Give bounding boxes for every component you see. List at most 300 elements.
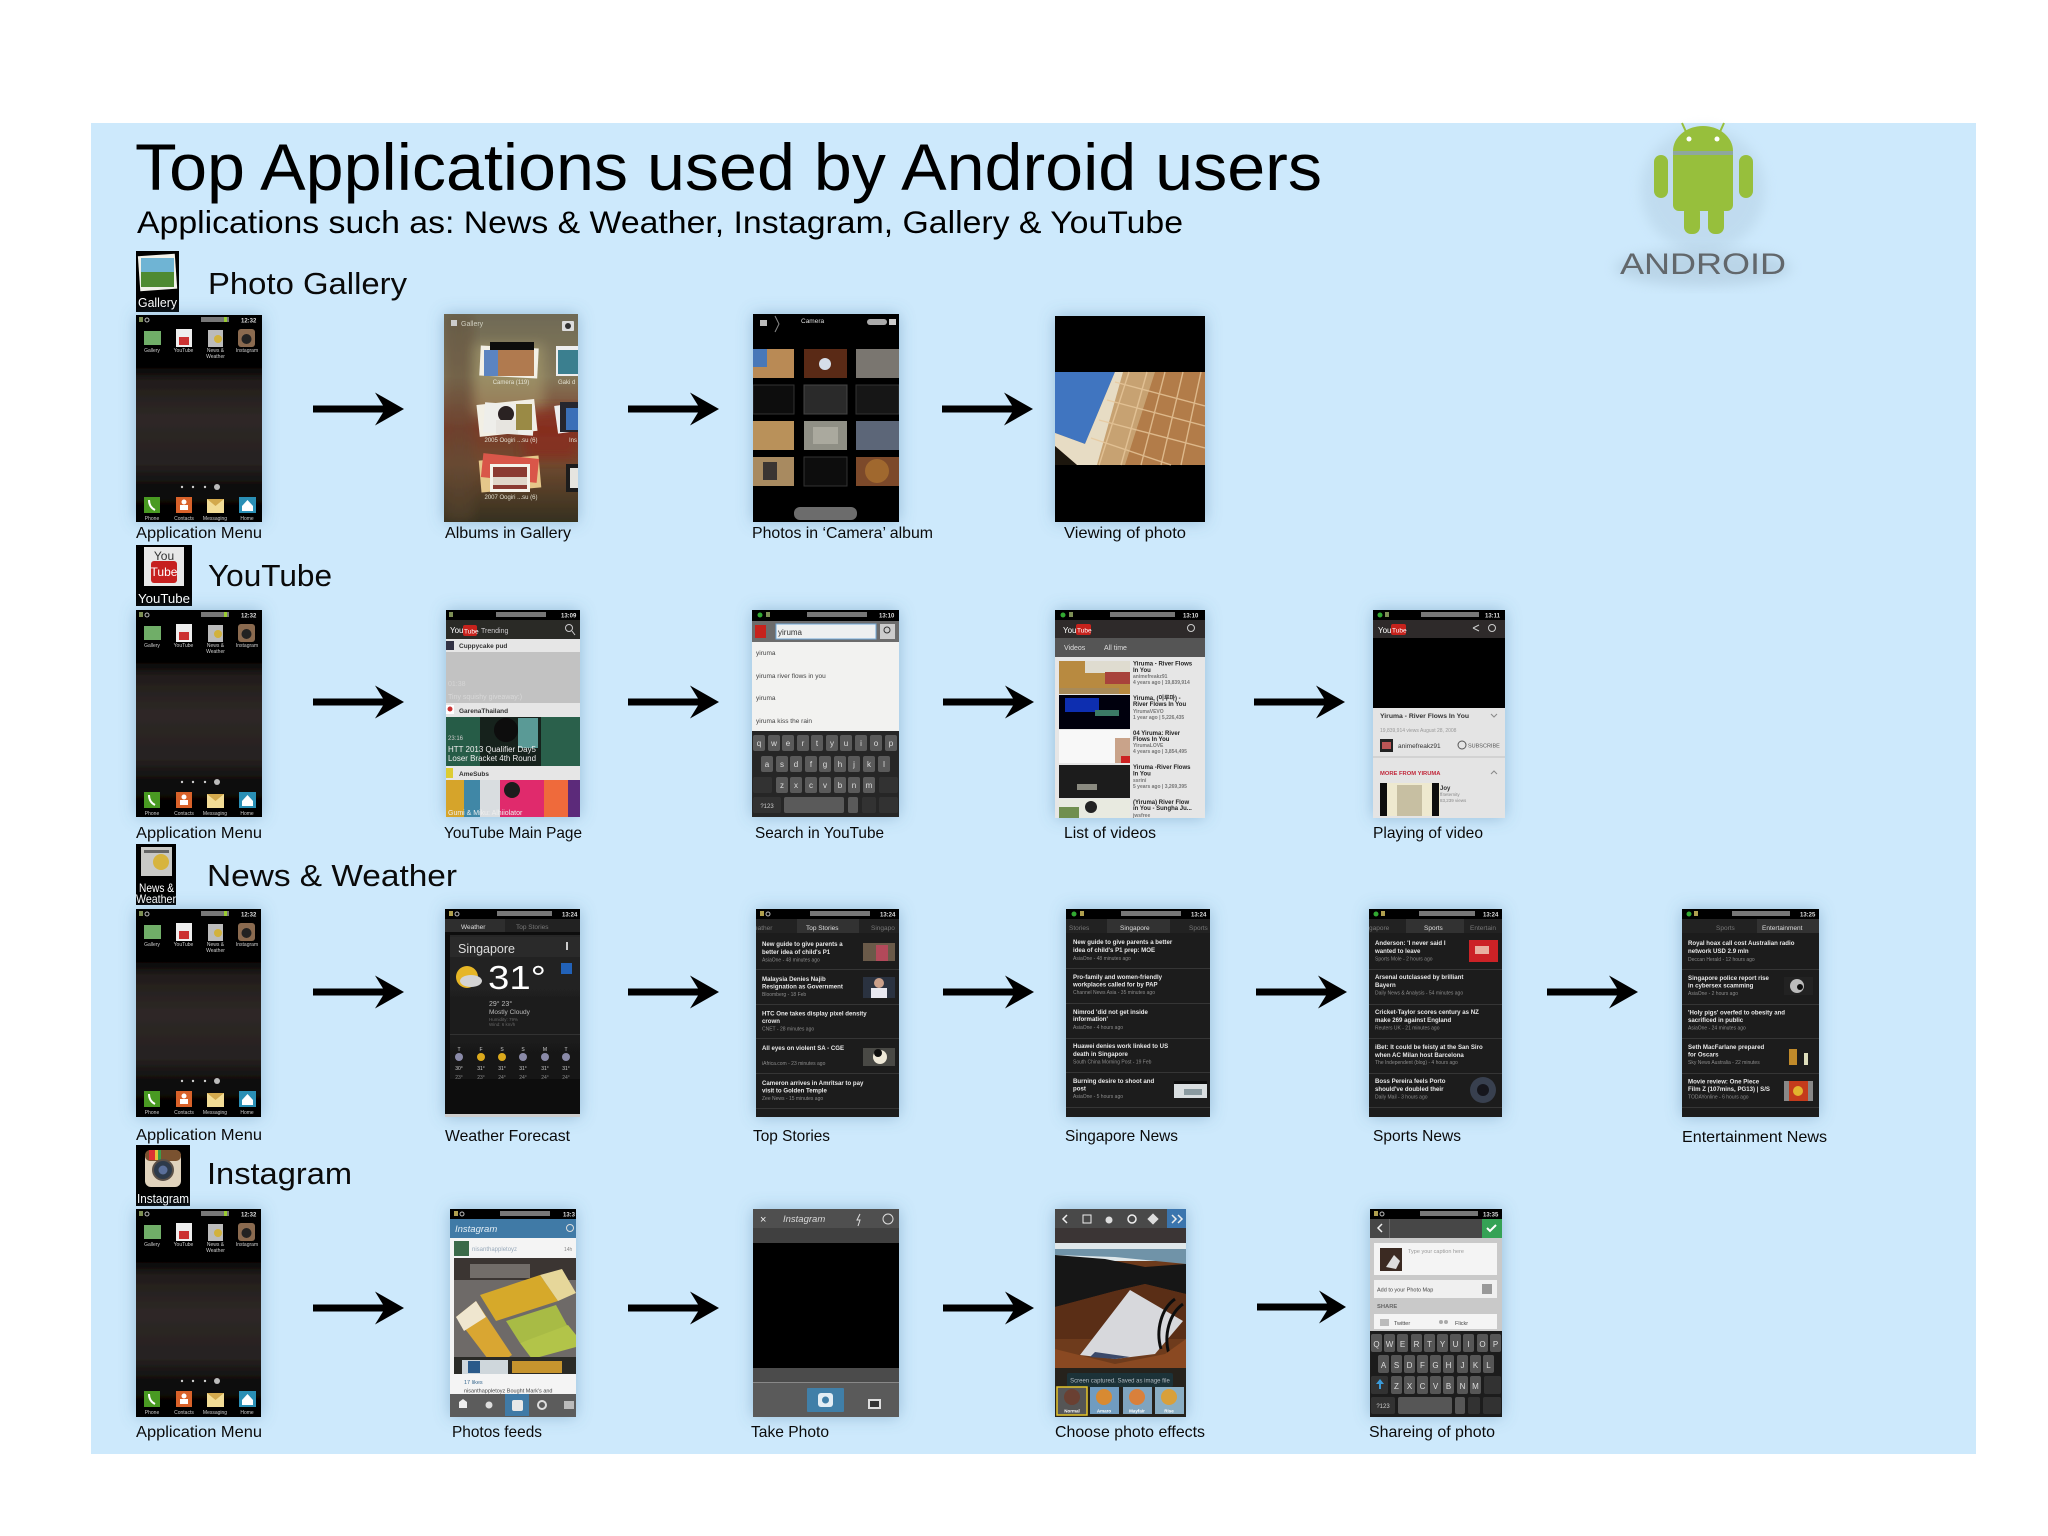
phone: playing of video xyxy=(1373,610,1505,818)
row: Instagram xyxy=(136,1145,1502,1441)
phone: YouTube main page: Tube xyxy=(464,628,479,636)
phone: application menu: YouTube xyxy=(174,348,194,354)
phone: application menu: 12:32 xyxy=(241,1212,257,1218)
phone: top stories: All eyes on violent SA - CGE xyxy=(762,1045,844,1052)
phone: photos feeds xyxy=(450,1209,576,1417)
phone: sports news: wanted to leave xyxy=(1374,948,1421,955)
icon: news and weather: News & xyxy=(139,881,174,895)
phone: Singapore news: AsiaOne - 5 hours ago xyxy=(1073,1094,1123,1100)
phone: YouTube main page: You xyxy=(450,626,464,635)
phone: application menu: News & xyxy=(207,643,225,649)
phone: top stories: Malaysia Denies Najib xyxy=(762,976,826,983)
phone: application menu: Phone xyxy=(145,811,159,817)
phone: sharing of photo: M xyxy=(1472,1382,1479,1391)
phone: photos in camera album: Camera xyxy=(801,318,825,325)
phone: Singapore news: Channel News Asia - 35 minutes ago xyxy=(1073,990,1155,996)
icon: news and weather: Weather xyxy=(136,892,176,906)
phone: top stories: iAfrica.com - 23 minutes ago xyxy=(762,1061,826,1067)
phone: application menu: 12:32 xyxy=(241,614,257,620)
phone: search in YouTube: n xyxy=(852,781,856,790)
phone: application menu: News & xyxy=(207,348,225,354)
phone: Singapore news: Huawei denies work linked to US xyxy=(1073,1043,1168,1050)
phone: sharing of photo: R xyxy=(1414,1340,1420,1349)
caption: application menu: Application Menu xyxy=(136,825,262,842)
caption: application menu: Application Menu xyxy=(136,525,262,542)
caption: playing of video: Playing of video xyxy=(1373,825,1483,842)
phone: top stories: AsiaOne - 48 minutes ago xyxy=(762,958,820,964)
phone: list of videos: YirumaLOVE xyxy=(1133,743,1164,749)
arrow xyxy=(313,976,404,1008)
phone: take photo xyxy=(753,1209,899,1417)
icon: gallery: Gallery xyxy=(138,296,178,310)
phone: weather forecast: 24° xyxy=(562,1075,570,1081)
phone: list of videos: River Flows In You xyxy=(1133,702,1186,708)
phone: application menu: Weather xyxy=(206,948,225,954)
phone: playing of video: animefreakz91 xyxy=(1398,743,1441,750)
phone: application menu: Weather xyxy=(206,1248,225,1254)
phone: albums in gallery: 2005 Oogiri ...su (6) xyxy=(484,438,538,444)
caption: sharing of photo: Shareing of photo xyxy=(1369,1424,1495,1441)
caption: YouTube main page: YouTube Main Page xyxy=(444,825,582,842)
phone: sports news: Daily News & Analysis - 54 minutes ago xyxy=(1375,990,1463,996)
phone: entertainment news: Royal hoax call cost Australian radio xyxy=(1688,940,1795,947)
phone: application menu: Gallery xyxy=(144,348,160,354)
caption: choose photo effects: Choose photo effects xyxy=(1055,1424,1205,1441)
phone: sports news: iBet: It could be feisty at the San Siro xyxy=(1375,1044,1483,1051)
phone: sharing of photo: U xyxy=(1453,1340,1459,1349)
phone: search in YouTube: g xyxy=(823,760,827,769)
icon: YouTube: You xyxy=(154,549,174,563)
icon: gallery xyxy=(136,251,179,312)
phone: weather forecast: 24° xyxy=(519,1075,527,1081)
phone: list of videos: ssrini xyxy=(1133,778,1147,784)
phone: YouTube main page: HTT 2013 Qualifier Day5 xyxy=(448,745,537,754)
phone: photos feeds: 13:3 xyxy=(563,1212,576,1218)
phone: search in YouTube: y xyxy=(830,739,834,748)
phone: top stories: Top Stories xyxy=(806,925,839,932)
phone: weather forecast: S xyxy=(521,1047,525,1053)
phone: application menu: Home xyxy=(240,811,254,817)
caption: photos feeds: Photos feeds xyxy=(452,1424,542,1441)
phone: Singapore news: Singapore xyxy=(1120,925,1150,932)
phone: sports news: when AC Milan host Barcelona xyxy=(1374,1052,1464,1059)
caption: Singapore news: Singapore News xyxy=(1065,1128,1178,1145)
phone: sports news: Cricket-Taylor scores century as NZ xyxy=(1375,1009,1479,1016)
arrow xyxy=(628,1292,719,1324)
phone: search in YouTube: b xyxy=(838,781,843,790)
phone: YouTube main page: 23:16 xyxy=(448,736,464,742)
phone: application menu: YouTube xyxy=(174,1242,194,1248)
phone: weather forecast: F xyxy=(479,1047,483,1053)
phone: list of videos: 1 year ago | 5,226,435 xyxy=(1133,715,1184,721)
phone: weather forecast: 31° xyxy=(498,1066,506,1072)
phone: weather forecast: 23° xyxy=(455,1075,463,1081)
phone: Singapore news: 13:24 xyxy=(1191,912,1207,918)
phone: playing of video: Tube xyxy=(1392,628,1407,634)
phone: sports news: Reuters UK - 21 minutes ago xyxy=(1375,1026,1440,1032)
icon: YouTube: Tube xyxy=(151,565,178,579)
phone: choose photo effects xyxy=(1055,1209,1186,1417)
phone: search in YouTube: d xyxy=(794,760,798,769)
icon: YouTube xyxy=(136,545,192,606)
phone: sharing of photo: Z xyxy=(1394,1382,1399,1391)
phone: search in YouTube: v xyxy=(823,781,827,790)
arrow xyxy=(1547,976,1638,1008)
phone: sharing of photo: P xyxy=(1493,1340,1498,1349)
phone: entertainment news: Seth MacFarlane prepared xyxy=(1688,1044,1764,1051)
phone: take photo: Instagram xyxy=(783,1214,825,1225)
arrow xyxy=(628,976,719,1008)
phone: YouTube main page: 13:09 xyxy=(561,614,577,620)
phone: playing of video: SUBSCRIBE xyxy=(1468,744,1500,750)
caption: top stories: Top Stories xyxy=(753,1128,830,1145)
phone: Singapore news: Pro-family and women-friendly xyxy=(1073,974,1163,981)
phone: search in YouTube: m xyxy=(866,781,873,790)
arrow xyxy=(313,1292,404,1324)
phone: application menu: Messaging xyxy=(203,811,227,817)
phone: top stories: Bloomberg - 18 Feb xyxy=(762,992,806,998)
phone: sharing of photo: S xyxy=(1394,1361,1399,1370)
phone: search in YouTube: i xyxy=(860,739,862,748)
phone: application menu: Messaging xyxy=(203,516,227,522)
phone: sharing of photo: Y xyxy=(1440,1340,1446,1349)
phone: sports news: Entertain xyxy=(1470,925,1496,932)
phone: albums in gallery: 2007 Oogiri ...su (6) xyxy=(484,495,538,501)
caption: entertainment news: Entertainment News xyxy=(1682,1129,1827,1146)
phone: sharing of photo: T xyxy=(1427,1340,1432,1349)
phone: YouTube main page: AmeSubs xyxy=(459,771,489,778)
phone: YouTube main page: Loser Bracket 4th Round xyxy=(448,754,536,763)
phone: search in YouTube: yiruma xyxy=(756,695,776,702)
phone: albums in gallery: Camera (119) xyxy=(493,380,529,386)
phone: top stories: Zee News - 15 minutes ago xyxy=(762,1096,823,1102)
row: YouTube xyxy=(136,545,1505,842)
phone: playing of video: ff4eternity xyxy=(1440,792,1460,797)
phone: sharing of photo: V xyxy=(1433,1382,1439,1391)
row: Photo Gallery xyxy=(136,251,1205,542)
phone: search in YouTube: c xyxy=(809,781,813,790)
arrow xyxy=(1254,686,1345,718)
phone: sharing of photo: N xyxy=(1460,1382,1466,1391)
phone: YouTube main page: Gumi & Miku: Alhiiolator xyxy=(448,810,523,817)
phone: choose photo effects: Screen captured. Saved as image file xyxy=(1070,1378,1171,1384)
phone: search in YouTube: yiruma river flows in you xyxy=(756,673,826,680)
phone: sharing of photo: H xyxy=(1446,1361,1452,1370)
phone: sharing of photo: 13:35 xyxy=(1483,1212,1499,1218)
phone: Singapore news: Sports xyxy=(1189,925,1209,932)
subtitle: Applications such as: News & Weather, Instagram, Gallery & YouTube xyxy=(137,204,1183,240)
phone: entertainment news: Sky News Australia - 22 minutes xyxy=(1688,1060,1760,1066)
arrow xyxy=(943,1292,1034,1324)
phone: weather forecast: M xyxy=(543,1047,547,1053)
phone: YouTube main page xyxy=(446,610,580,817)
phone: list of videos: 04 Yiruma: River xyxy=(1133,731,1181,737)
phone: sharing of photo: Add to your Photo Map xyxy=(1377,1288,1433,1294)
caption: take photo: Take Photo xyxy=(751,1424,829,1441)
arrow xyxy=(1256,976,1347,1008)
phone: application menu: YouTube xyxy=(174,942,194,948)
phone: entertainment news: TODAYonline - 6 hours ago xyxy=(1688,1094,1749,1100)
phone: sports news: Sports Mole - 2 hours ago xyxy=(1375,956,1433,962)
phone: search in YouTube: x xyxy=(794,781,798,790)
phone: search in YouTube: k xyxy=(867,760,872,769)
phone: sharing of photo: SHARE xyxy=(1377,1304,1397,1310)
phone: weather forecast: 31° xyxy=(519,1066,527,1072)
phone: application menu: Contacts xyxy=(174,516,194,522)
phone: search in YouTube: s xyxy=(780,760,784,769)
phone: application menu: Gallery xyxy=(144,643,160,649)
phone: list of videos: Yiruma -River Flows xyxy=(1133,765,1191,771)
phone: application menu: 12:32 xyxy=(241,318,257,324)
phone: entertainment news xyxy=(1682,909,1819,1117)
phone: Singapore news: Stories xyxy=(1069,925,1090,932)
phone: Singapore news: idea of child's P1 prep: MOE xyxy=(1073,947,1155,954)
phone: top stories: 13:24 xyxy=(880,912,896,918)
phone: list of videos: In You xyxy=(1133,772,1151,778)
phone: weather forecast: Top Stories xyxy=(516,924,549,931)
phone: albums in gallery: Gaki d xyxy=(558,380,575,386)
phone: entertainment news: Entertainment xyxy=(1762,925,1803,932)
phone: weather forecast: T xyxy=(564,1047,568,1053)
phone: application menu: 12:32 xyxy=(241,912,257,918)
phone: entertainment news: sacrificed in public xyxy=(1688,1017,1744,1024)
phone: sharing of photo: Q xyxy=(1373,1340,1380,1349)
caption: albums in gallery: Albums in Gallery xyxy=(445,525,571,542)
icon: Instagram: Instagram xyxy=(137,1192,189,1206)
phone: list of videos: Flows In You xyxy=(1133,737,1170,743)
arrow xyxy=(628,392,719,426)
phone: weather forecast: 31° xyxy=(562,1066,570,1072)
phone: list of videos: Yiruma, (이루마) - xyxy=(1133,694,1181,702)
caption: list of videos: List of videos xyxy=(1064,825,1156,842)
phone: photos in camera album xyxy=(753,314,899,522)
phone: Singapore news xyxy=(1066,909,1210,1117)
heading: Instagram: Instagram xyxy=(207,1156,352,1191)
phone: sharing of photo: Flickr xyxy=(1455,1321,1468,1327)
phone: list of videos xyxy=(1055,610,1205,819)
phone: weather forecast: 31° xyxy=(541,1066,549,1072)
phone: list of videos: 13:10 xyxy=(1183,614,1199,620)
phone: sharing of photo: O xyxy=(1479,1340,1486,1349)
panel: light blue background xyxy=(91,123,1976,1454)
phone: sharing of photo: L xyxy=(1486,1361,1491,1370)
phone: sports news: Arsenal outclassed by brilliant xyxy=(1375,974,1463,981)
phone: search in YouTube: e xyxy=(786,739,791,748)
phone: search in YouTube: w xyxy=(770,739,777,748)
phone: list of videos: 4 years ago | 3,854,495 xyxy=(1133,749,1187,755)
phone: search in YouTube: l xyxy=(883,760,885,769)
phone: sports news: make 269 against England xyxy=(1375,1017,1451,1024)
phone: YouTube main page: GarenaThailand xyxy=(459,708,508,715)
phone: Singapore news: AsiaOne - 48 minutes ago xyxy=(1073,956,1131,962)
phone: sports news: 13:24 xyxy=(1483,912,1499,918)
phone: application menu xyxy=(136,1209,261,1417)
phone: application menu: Weather xyxy=(206,649,225,655)
phone: YouTube main page: Cuppycake pud xyxy=(459,643,507,650)
icon: news and weather xyxy=(136,844,176,906)
phone: Singapore news: AsiaOne - 4 hours ago xyxy=(1073,1025,1123,1031)
phone: search in YouTube: ?123 xyxy=(760,804,774,810)
phone: search in YouTube: 13:10 xyxy=(879,614,895,620)
phone: sports news: The Independent (blog) - 4 hours ago xyxy=(1375,1060,1458,1066)
phone: top stories: Singapo xyxy=(871,925,895,932)
phone: weather forecast: 23° xyxy=(477,1075,485,1081)
arrow xyxy=(313,686,404,718)
phone: playing of video: 19,839,914 views August 28, 2008 xyxy=(1380,728,1457,734)
phone: list of videos: All time xyxy=(1104,645,1127,652)
phone: list of videos: 4 years ago | 19,839,914 xyxy=(1133,680,1190,686)
phone: weather forecast: 30° xyxy=(455,1066,463,1072)
phone: list of videos: animefreakz91 xyxy=(1133,674,1168,680)
phone: top stories: Resignation as Government xyxy=(762,984,843,990)
title: Top Applications used by Android users xyxy=(135,130,1322,204)
phone: application menu: Gallery xyxy=(144,1242,160,1248)
phone: weather forecast: S xyxy=(500,1047,504,1053)
phone: sharing of photo: A xyxy=(1381,1361,1387,1370)
phone: YouTube main page: 01:38 xyxy=(448,681,466,688)
phone: sharing of photo: Type your caption here xyxy=(1408,1249,1464,1255)
phone: entertainment news: network USD 2.9 mln xyxy=(1688,948,1749,955)
phone: entertainment news: Sports xyxy=(1716,925,1736,932)
phone: albums in gallery xyxy=(444,314,588,522)
caption: search in YouTube: Search in YouTube xyxy=(755,825,884,842)
phone: search in YouTube: yiruma xyxy=(778,628,803,637)
phone: application menu: Messaging xyxy=(203,1410,227,1416)
phone: entertainment news: for Oscars xyxy=(1688,1052,1719,1058)
icon: Instagram xyxy=(136,1145,190,1206)
phone: list of videos: Videos xyxy=(1064,645,1086,652)
phone: playing of video: 83,239 views xyxy=(1440,798,1467,803)
phone: choose photo effects: Mayfair xyxy=(1129,1408,1145,1414)
phone: top stories: eather xyxy=(754,925,773,932)
phone: albums in gallery: Gallery xyxy=(461,321,484,328)
heading: News & Weather: News & Weather xyxy=(207,858,457,893)
phone: application menu: Contacts xyxy=(174,811,194,817)
phone: weather forecast: 24° xyxy=(498,1075,506,1081)
phone: application menu: Instagram xyxy=(236,348,258,354)
phone: application menu: Contacts xyxy=(174,1410,194,1416)
phone: take photo: × xyxy=(760,1214,766,1226)
phone: list of videos: (Yiruma) River Flow xyxy=(1133,800,1189,806)
phone: list of videos: You xyxy=(1063,626,1076,635)
phone: albums in gallery: Ins xyxy=(569,438,577,444)
phone: search in YouTube: yiruma kiss the rain xyxy=(756,718,812,725)
phone: weather forecast: Weather xyxy=(461,924,486,931)
phone: Singapore news: information' xyxy=(1073,1016,1109,1023)
phone: application menu: Phone xyxy=(145,1110,159,1116)
phone: weather forecast: 13:24 xyxy=(562,912,578,918)
phone: sports news: gapore xyxy=(1369,925,1390,932)
phone: sports news: Sports xyxy=(1424,925,1444,932)
phone: entertainment news: 'Holy pigs' overfed to obesity and xyxy=(1688,1010,1785,1016)
arrow xyxy=(942,392,1033,426)
phone: application menu: Messaging xyxy=(203,1110,227,1116)
phone: photos feeds: 17 likes xyxy=(464,1380,483,1386)
phone: application menu: News & xyxy=(207,942,225,948)
phone: weather forecast: 29° 23° xyxy=(489,1000,512,1008)
heading: Photo Gallery: Photo Gallery xyxy=(208,266,408,301)
phone: weather forecast xyxy=(445,909,580,1117)
phone: application menu: Phone xyxy=(145,1410,159,1416)
phone: photos feeds: nisanthappletoyz xyxy=(472,1247,517,1253)
phone: playing of video: Joy xyxy=(1440,786,1451,792)
phone: sports news: Daily Mail - 3 hours ago xyxy=(1375,1094,1428,1100)
phone: application menu: Instagram xyxy=(236,1242,258,1248)
phone: Singapore news: Nimrod 'did not get inside xyxy=(1073,1009,1149,1016)
phone: sharing of photo: K xyxy=(1473,1361,1479,1370)
phone: sharing of photo: W xyxy=(1386,1340,1394,1349)
phone: application menu xyxy=(136,610,262,817)
phone: top stories: visit to Golden Temple xyxy=(762,1088,828,1094)
phone: YouTube main page: Trending xyxy=(481,628,508,635)
phone: sharing of photo: I xyxy=(1467,1340,1470,1349)
caption: application menu: Application Menu xyxy=(136,1424,262,1441)
phone: search in YouTube: o xyxy=(874,739,879,748)
phone: entertainment news: AsiaOne - 24 minutes ago xyxy=(1688,1026,1746,1032)
phone: list of videos: 5 years ago | 3,269,395 xyxy=(1133,784,1187,790)
phone: photos feeds: nisanthappletoyz Bought Mark's and xyxy=(464,1388,552,1394)
phone: top stories xyxy=(754,909,899,1117)
phone: weather forecast: 24° xyxy=(541,1075,549,1081)
arrow xyxy=(1257,1290,1346,1324)
phone: photos feeds: Instagram xyxy=(455,1224,497,1235)
phone: weather forecast: Wind: 6 km/h xyxy=(489,1022,516,1027)
phone: search in YouTube: r xyxy=(802,739,805,748)
phone: top stories: HTC One takes display pixel density xyxy=(762,1010,867,1018)
phone: top stories: better idea of child's P1 xyxy=(762,949,831,956)
phone: search in YouTube: q xyxy=(757,739,761,748)
heading: YouTube: YouTube xyxy=(208,558,332,593)
phone: search in YouTube: t xyxy=(816,739,819,748)
phone: top stories: crown xyxy=(762,1018,780,1025)
phone: search in YouTube: u xyxy=(844,739,848,748)
phone: application menu: Weather xyxy=(206,354,225,360)
phone: photos feeds: 14h xyxy=(564,1247,573,1253)
row: News & Weather xyxy=(136,844,1827,1146)
phone: search in YouTube: a xyxy=(765,760,770,769)
phone: top stories: CNET - 28 minutes ago xyxy=(762,1026,814,1032)
phone: top stories: New guide to give parents a xyxy=(762,941,843,948)
logo: android robot and wordmark: ANDROID xyxy=(1620,248,1786,281)
caption: weather forecast: Weather Forecast xyxy=(445,1128,571,1145)
phone: sharing of photo: C xyxy=(1420,1382,1426,1391)
phone: sports news: Bayern xyxy=(1375,982,1396,989)
phone: list of videos: in You - Sungha Ju... xyxy=(1133,806,1192,812)
phone: application menu: Instagram xyxy=(236,643,258,649)
phone: entertainment news: Film Z (107mins, PG13) | S/S xyxy=(1688,1086,1770,1093)
phone: playing of video: 13:11 xyxy=(1485,614,1501,620)
phone: application menu: Gallery xyxy=(144,942,160,948)
phone: sharing of photo: ?123 xyxy=(1376,1404,1390,1410)
phone: weather forecast: 31° xyxy=(477,1066,485,1072)
phone: weather forecast: Humidity: 79% xyxy=(489,1017,518,1022)
phone: search in YouTube: p xyxy=(889,739,894,748)
phone: sharing of photo: E xyxy=(1400,1340,1405,1349)
phone: application menu xyxy=(136,315,262,522)
phone: sharing of photo: Twitter xyxy=(1394,1321,1410,1327)
phone: Singapore news: post xyxy=(1073,1086,1086,1092)
caption: application menu: Application Menu xyxy=(136,1127,262,1144)
phone: choose photo effects: Amaro xyxy=(1097,1408,1111,1414)
phone: search in YouTube: j xyxy=(852,760,855,769)
phone: entertainment news: AsiaOne - 2 hours ago xyxy=(1688,991,1738,997)
phone: entertainment news: 13:25 xyxy=(1800,912,1816,918)
phone: search in YouTube: h xyxy=(838,760,842,769)
phone: application menu: Instagram xyxy=(236,942,258,948)
icon: YouTube: YouTube xyxy=(138,591,190,606)
arrow xyxy=(943,976,1034,1008)
phone: Singapore news: South China Morning Post - 19 Feb xyxy=(1073,1060,1152,1066)
